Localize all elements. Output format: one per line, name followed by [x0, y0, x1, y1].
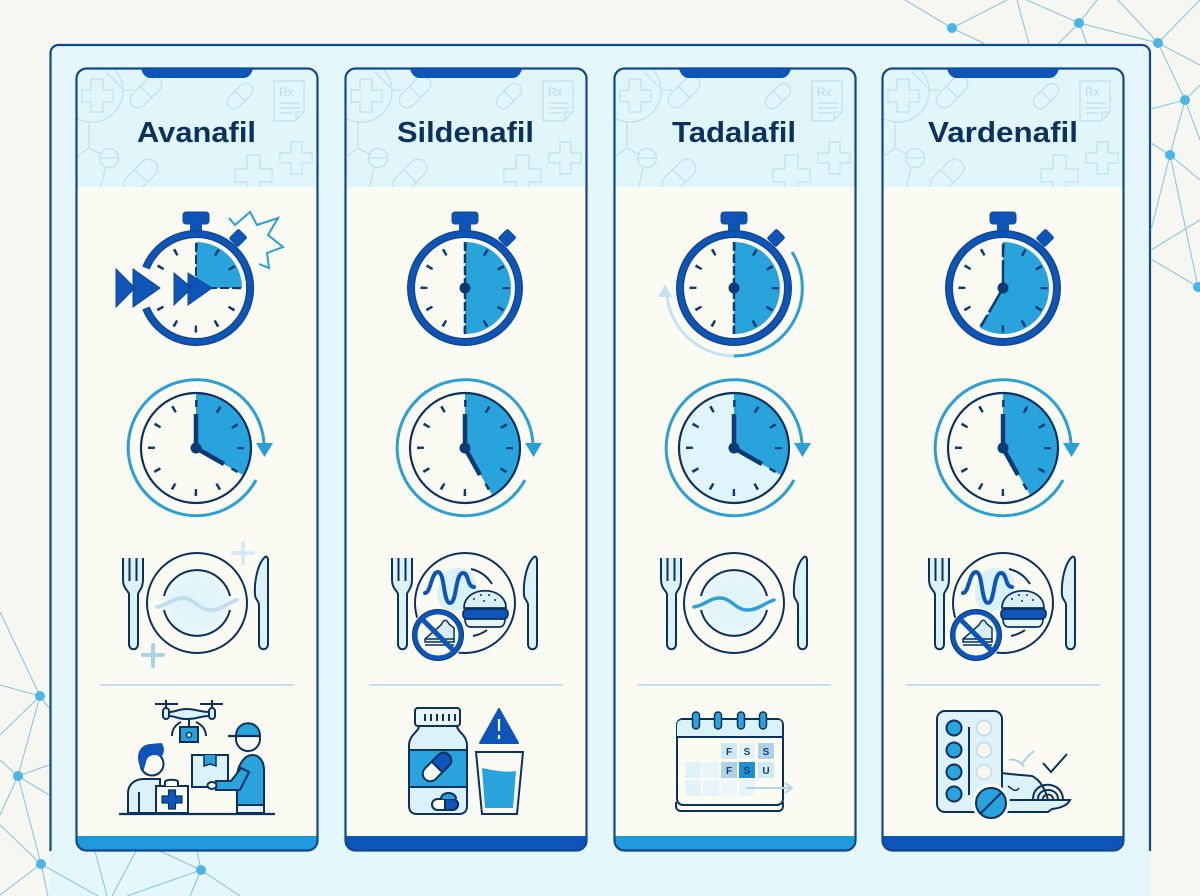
divider	[100, 684, 294, 686]
panel: Sildenafil	[330, 60, 586, 850]
heading: Tadalafil: Tadalafil	[672, 117, 796, 149]
icon: weekend calendar: S	[744, 766, 751, 777]
icon: duration clock	[128, 380, 273, 516]
panel: Tadalafil	[599, 60, 856, 850]
network background top right	[905, 0, 1200, 292]
icon: weekend calendar: F	[726, 766, 732, 777]
icon: weekend calendar: S	[763, 747, 770, 758]
icon: seven-twelfths stopwatch	[949, 212, 1057, 342]
panel: Sildenafil: Rx	[548, 85, 563, 99]
icon: duration clock	[397, 380, 542, 516]
icon: fast stopwatch	[116, 212, 283, 342]
icon: weekend calendar: F	[726, 747, 732, 758]
panel: Vardenafil	[867, 60, 1124, 850]
divider	[637, 684, 831, 686]
icon: pill bottle and water warning	[409, 708, 523, 814]
icon: weekend calendar: U	[762, 766, 770, 777]
panel: Avanafil	[61, 60, 318, 850]
icon: half stopwatch	[411, 212, 519, 342]
heading: Avanafil: Avanafil	[137, 117, 256, 149]
panel: Avanafil: Rx	[279, 85, 294, 99]
icon: duration clock	[666, 380, 811, 516]
icon: plate with steady wave	[661, 553, 807, 653]
icon: weekend calendar	[676, 712, 792, 811]
icon: drone delivery	[119, 700, 275, 814]
heading: Sildenafil: Sildenafil	[397, 117, 534, 149]
icon: empty plate, food neutral	[123, 543, 268, 666]
icon: fatty meal warning plate	[392, 553, 537, 662]
panel: Tadalafil: Rx	[817, 85, 832, 99]
divider	[906, 684, 1100, 686]
heading: Vardenafil: Vardenafil	[928, 117, 1078, 149]
icon: half stopwatch with long-acting arc	[658, 212, 802, 356]
icon: duration clock	[935, 380, 1080, 516]
panel: Vardenafil: Rx	[1085, 85, 1100, 99]
icon: blister pack and meal	[937, 711, 1070, 822]
divider	[369, 684, 563, 686]
network background lower left	[0, 612, 240, 896]
icon: weekend calendar: S	[744, 747, 751, 758]
icon: fatty meal warning plate	[929, 553, 1075, 662]
